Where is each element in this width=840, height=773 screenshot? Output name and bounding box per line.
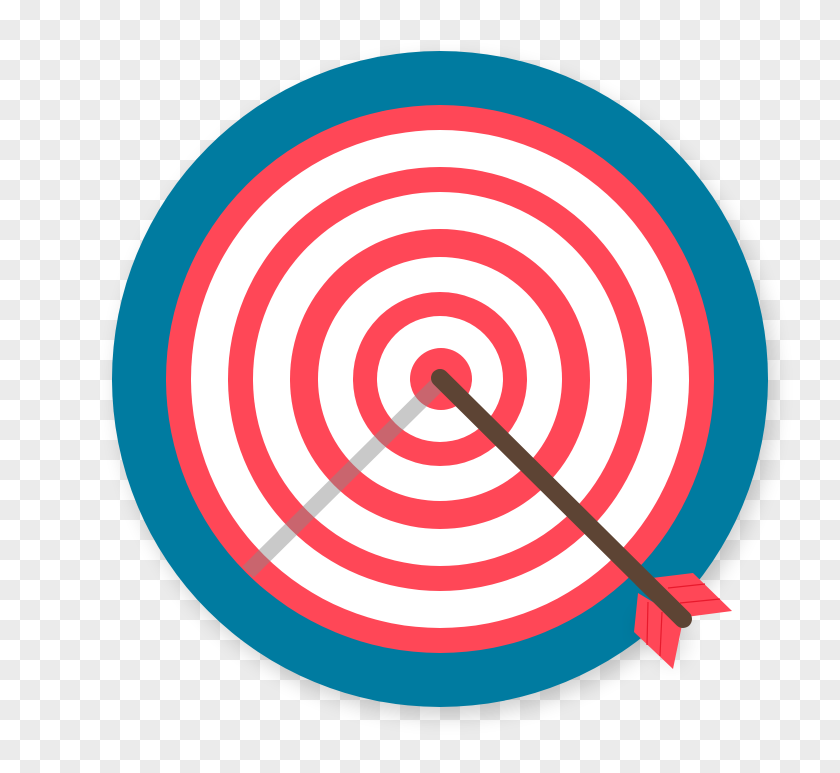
arrow [440,378,732,669]
target [112,51,774,716]
fletching lower [634,593,683,669]
shaft [440,378,683,619]
arrow shadow [248,384,438,572]
fletching upper [652,573,732,617]
